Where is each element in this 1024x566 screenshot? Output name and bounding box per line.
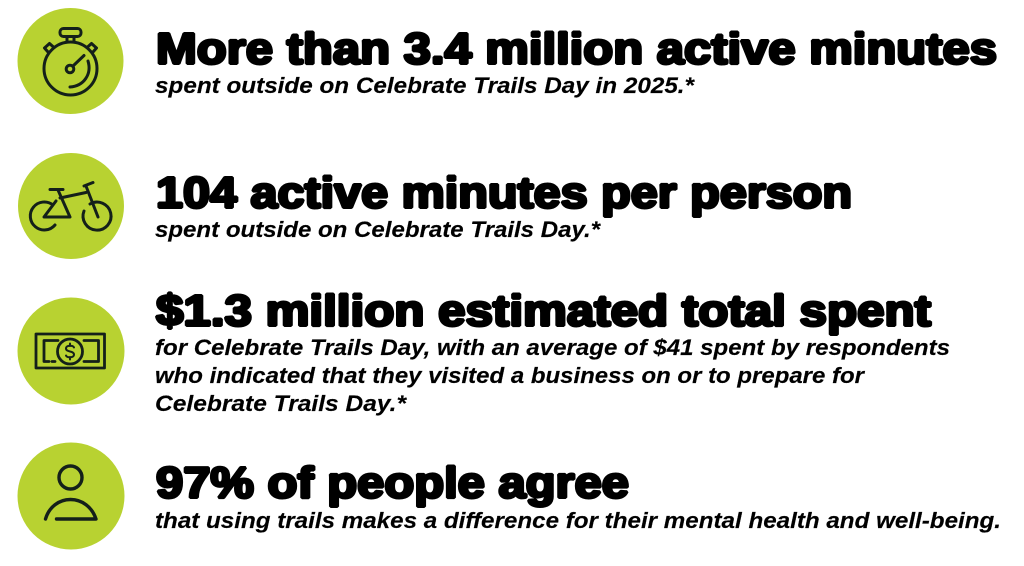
icon: banknote [18, 298, 124, 404]
icon: stopwatch [18, 8, 124, 114]
stat 1 heading: More than 3.4 million active minutes [156, 26, 997, 74]
stat 3 description [155, 335, 950, 416]
stat 3 description: for Celebrate Trails Day, with an average of $41 spent by respondents [155, 335, 950, 360]
stat 3 description: Celebrate Trails Day.* [155, 391, 408, 416]
stat 4 description: that using trails makes a difference for their mental health and well-being. [155, 508, 1001, 533]
stat 3 heading: $1.3 million estimated total spent [156, 288, 931, 336]
stat 4 heading: 97% of people agree [156, 460, 629, 508]
stat 1 description: spent outside on Celebrate Trails Day in 2025.* [155, 73, 696, 98]
icon: bicycle [18, 153, 124, 259]
stat 3 description: who indicated that they visited a business on or to prepare for [155, 363, 866, 388]
stat 2 heading: 104 active minutes per person [156, 170, 852, 218]
stat 2 description: spent outside on Celebrate Trails Day.* [155, 217, 602, 242]
icon: person [18, 442, 124, 550]
